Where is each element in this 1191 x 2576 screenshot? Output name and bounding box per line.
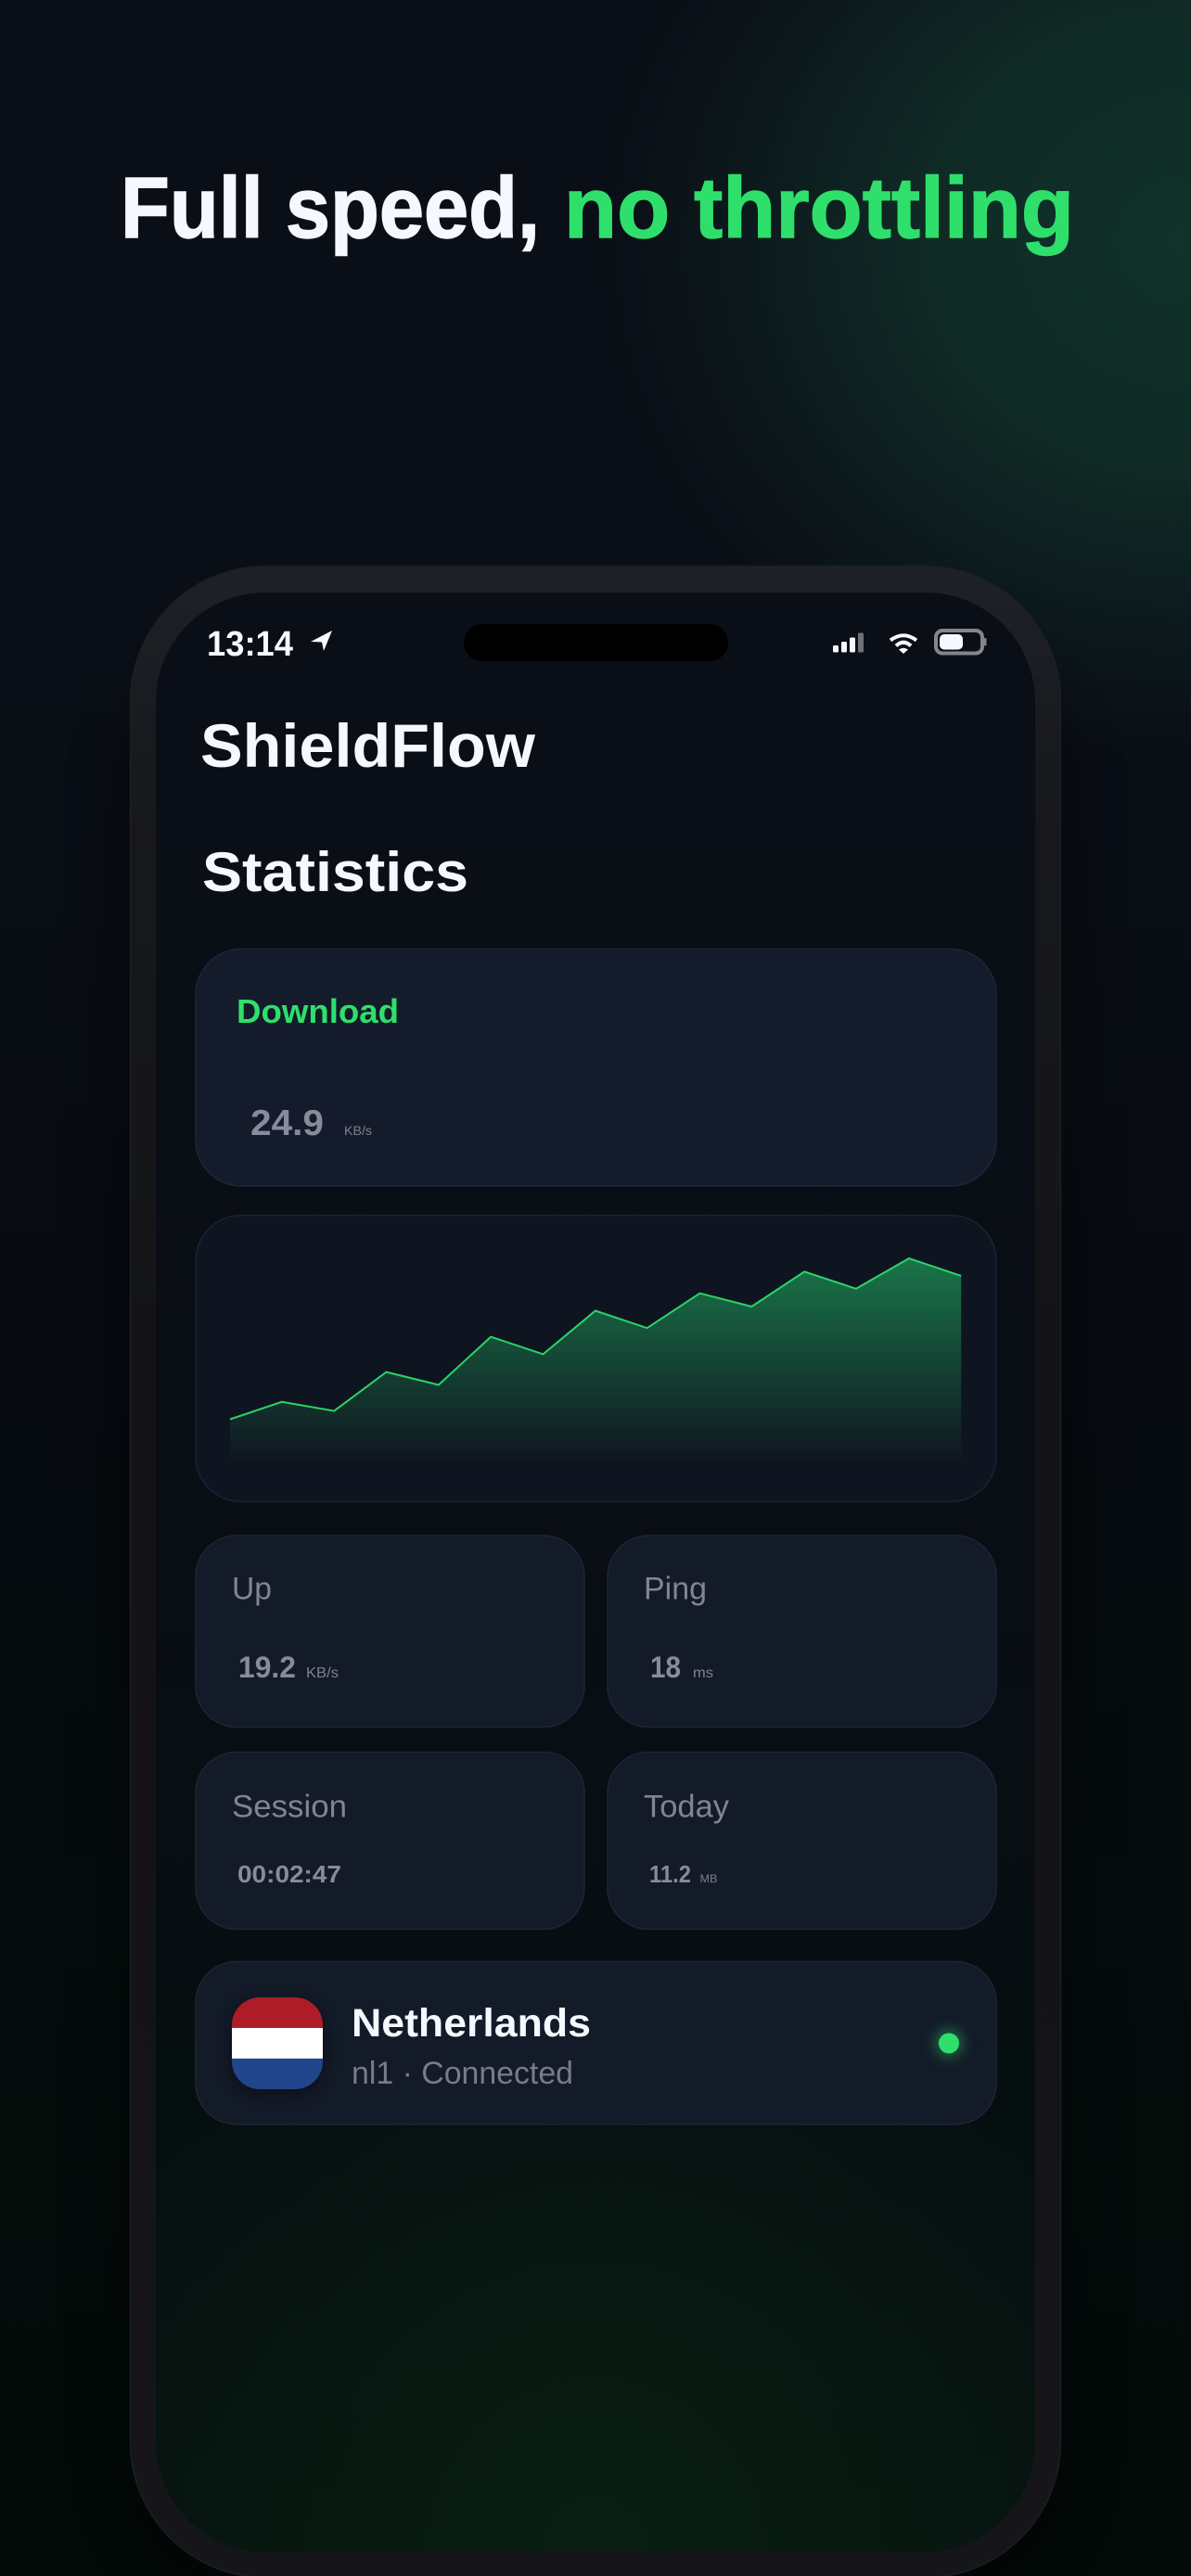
title: Full speed, xyxy=(121,159,540,256)
title: no throttling xyxy=(564,159,1074,256)
status bar time: 13:14 xyxy=(207,625,293,664)
app name: ShieldFlow xyxy=(200,711,536,780)
panel: up: Up xyxy=(232,1571,272,1606)
panel: ping: Ping xyxy=(644,1571,707,1606)
panel: session: 00:02:47 xyxy=(237,1860,341,1888)
panel: session: Session xyxy=(232,1790,347,1825)
icon: battery xyxy=(936,631,987,653)
panel: today: Today xyxy=(644,1790,729,1825)
phone xyxy=(121,566,1070,2576)
panel: today xyxy=(608,1753,996,1929)
panel: up xyxy=(196,1536,584,1727)
panel: download: 24.9 xyxy=(250,1103,324,1143)
panel: server: Netherlands xyxy=(352,2001,591,2046)
title xyxy=(121,159,1074,256)
icon: location arrow xyxy=(311,631,332,651)
panel: up: 19.2 xyxy=(238,1651,296,1684)
panel: ping xyxy=(608,1536,996,1727)
icon: signal bars xyxy=(833,632,864,653)
status dot xyxy=(936,2031,962,2057)
panel: download xyxy=(196,950,996,1186)
panel: server: nl1 · Connected xyxy=(352,2056,573,2091)
section heading: Statistics xyxy=(202,841,468,903)
panel: area chart xyxy=(196,1215,996,1502)
phone frame xyxy=(130,566,1061,2576)
panel: today: MB xyxy=(699,1872,718,1885)
icon: wifi xyxy=(890,635,916,654)
chart line xyxy=(230,1258,961,1420)
panel: ping: 18 xyxy=(650,1651,681,1684)
panel: session xyxy=(196,1753,584,1929)
chart area fill xyxy=(230,1258,961,1462)
panel: today: 11.2 xyxy=(649,1860,691,1888)
panel: download: Download xyxy=(237,992,399,1030)
dynamic island xyxy=(464,624,728,661)
panel: ping: ms xyxy=(693,1665,713,1681)
panel: server xyxy=(196,1962,996,2124)
panel: download: KB/s xyxy=(344,1123,372,1138)
icon: netherlands flag xyxy=(232,1997,323,2093)
panel: up: KB/s xyxy=(306,1665,339,1681)
phone screen xyxy=(156,593,1035,2552)
